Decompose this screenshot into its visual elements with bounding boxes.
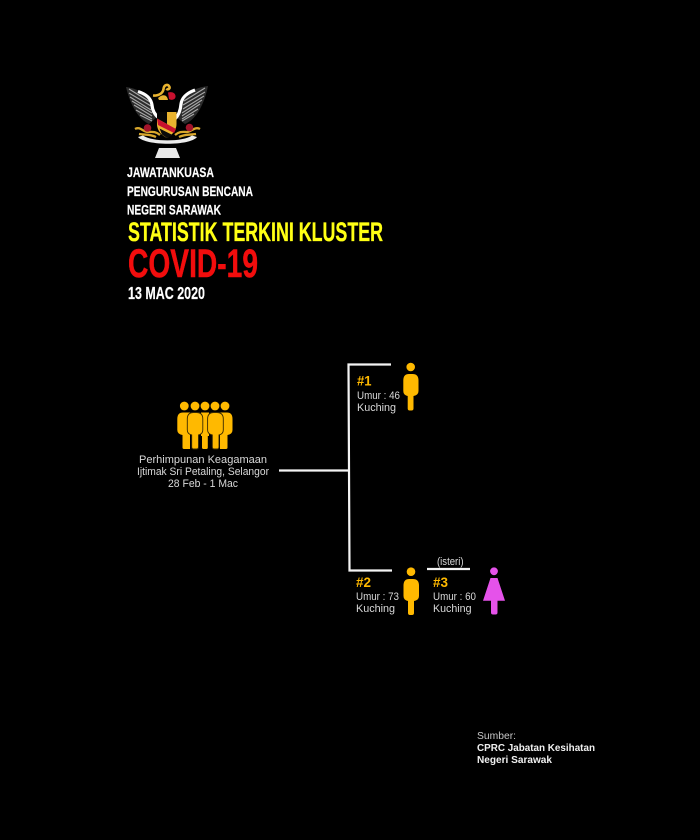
case 2 details: Kuching	[356, 603, 395, 615]
source credit: Negeri Sarawak	[477, 754, 552, 766]
case 1 details	[357, 390, 400, 414]
heading: committee name: NEGERI SARAWAK	[127, 202, 221, 218]
gathering description: Ijtimak Sri Petaling, Selangor	[137, 466, 269, 478]
crowd heads	[180, 402, 229, 410]
crowd front figures	[187, 412, 223, 449]
icon: male patient 2	[404, 567, 419, 615]
gathering description	[137, 454, 269, 490]
source credit: Sumber:	[477, 730, 516, 742]
right wing	[175, 86, 208, 124]
source credit	[477, 730, 595, 766]
gold foliage and red flowers	[135, 124, 200, 137]
icon: gathering crowd	[177, 402, 232, 449]
case 3 details: Kuching	[433, 603, 472, 615]
case 3 details: Umur : 60	[433, 591, 476, 603]
case 2 label: #2	[356, 575, 371, 590]
case 3	[433, 567, 505, 615]
white tail	[155, 148, 180, 158]
crowd back figures	[177, 412, 232, 449]
heading: committee name: JAWATANKUASA	[127, 164, 214, 180]
white scroll	[138, 136, 197, 144]
case 2 details	[356, 591, 399, 615]
case 2	[356, 567, 419, 615]
heading: statistics title: STATISTIK TERKINI KLUSTER	[128, 217, 383, 247]
heading: committee name	[127, 164, 253, 218]
icon: female patient 3	[483, 567, 505, 614]
left wing	[126, 87, 159, 124]
crest: gold crown and red plume	[153, 85, 176, 100]
icon: Sarawak coat of arms	[126, 85, 208, 158]
heading: committee name: PENGURUSAN BENCANA	[127, 183, 253, 199]
gathering description: 28 Feb - 1 Mac	[168, 478, 238, 490]
shield	[157, 112, 176, 138]
icon: male patient 1	[403, 363, 418, 410]
case 1 label: #1	[357, 374, 372, 388]
case 1	[357, 363, 418, 414]
case 1 details: Umur : 46	[357, 390, 400, 402]
relation label: wife: (isteri)	[437, 556, 464, 568]
heading: COVID-19: COVID-19	[128, 242, 258, 286]
case 3 label: #3	[433, 575, 448, 590]
gathering description: Perhimpunan Keagamaan	[139, 454, 267, 466]
title block	[127, 164, 383, 303]
tree connector lines	[279, 364, 470, 570]
date: 13 MAC 2020	[128, 283, 205, 303]
case 1 details: Kuching	[357, 402, 396, 414]
source credit: CPRC Jabatan Kesihatan	[477, 742, 595, 754]
case 3 details	[433, 591, 476, 615]
case 2 details: Umur : 73	[356, 591, 399, 603]
